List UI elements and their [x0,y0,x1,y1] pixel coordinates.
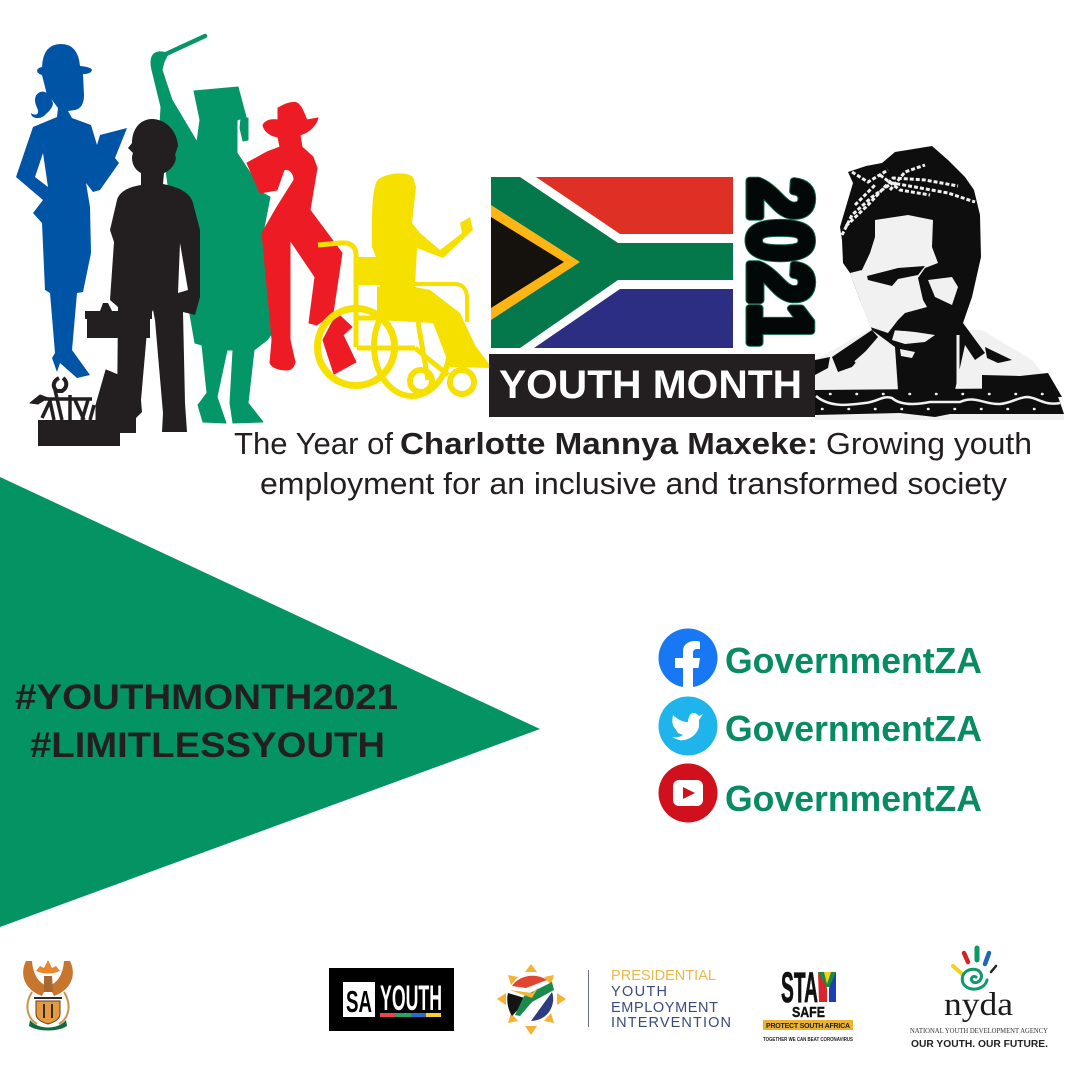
hashtags: #YOUTHMONTH2021 [15,678,398,717]
logo wordmark [611,968,731,1031]
green triangle panel [0,477,540,927]
icon: twitter [658,696,718,756]
hashtags [15,678,398,765]
logo divider [588,970,589,1027]
portrait bust background [815,328,1064,420]
social: twitter [658,696,982,756]
silhouette: green graduate [151,36,277,423]
subtitle [234,426,1032,501]
logo: NYDA: OUR YOUTH. OUR FUTURE. [911,1038,1048,1050]
silhouette: blue woman with clipboard [16,44,127,378]
portrait garment dots [822,394,1060,409]
logo wordmark: INTERVENTION [611,1015,731,1031]
logo: NYDA: nyda [944,987,1013,1023]
logo hand and spiral [953,948,996,989]
subtitle: The Year of [234,426,393,461]
social: twitter: GovernmentZA [725,708,982,749]
flag black triangle [491,217,564,308]
logo: Stay Safe: TOGETHER WE CAN BEAT CORONAVIRUS [763,1037,853,1043]
subtitle: employment for an inclusive and transformed society [260,466,1008,501]
logo sun rays [497,964,566,1035]
silhouette: black worker with toolbox [38,119,200,446]
social: facebook: GovernmentZA [725,640,982,681]
logo: NYDA [910,948,1049,1050]
portrait face highlights [850,215,938,333]
silhouette: red worker with hat [247,102,356,374]
logo globe flag [507,976,554,1022]
illustration: youth silhouettes [16,36,492,446]
portrait hair and shadow [840,146,985,390]
year 2021 vertical: 2021 [731,178,830,345]
year 2021 vertical: 2021 [731,178,830,345]
icon: youtube [658,764,718,822]
flag green pall [491,177,733,348]
portrait neck bead strip [956,335,960,390]
logo: SA Youth [329,968,454,1031]
logo: NYDA: NATIONAL YOUTH DEVELOPMENT AGENCY [910,1026,1049,1035]
logo: Stay Safe [763,964,853,1043]
icon: facebook [658,628,718,688]
logo wordmark: EMPLOYMENT [611,1000,718,1016]
portrait neckline lines [855,340,880,362]
logo: coat of arms [23,960,73,1030]
portrait right cheek [928,277,958,305]
subtitle: Growing youth [826,426,1032,461]
flag gold triangle [491,205,580,320]
South African flag [491,177,733,348]
social: youtube: GovernmentZA [725,778,982,819]
portrait collar patches [815,330,1062,397]
logo: Stay Safe: STA [781,964,818,1012]
portrait: Charlotte Maxeke [815,146,1064,420]
subtitle: Charlotte Mannya Maxeke: [400,426,818,461]
portrait left eye [867,266,925,286]
portrait mouth area [892,330,935,358]
social: youtube [658,764,982,822]
portrait garment wave [816,396,1060,405]
logo wordmark: PRESIDENTIAL [611,968,716,984]
logo: SA Youth: YOUTH [380,979,442,1018]
logo wordmark: YOUTH [611,984,667,1000]
logo: SA Youth: SA [346,984,372,1019]
portrait garment band [815,388,1064,417]
portrait scarf pattern [842,165,975,235]
logo: presidential youth employment intervention [497,964,731,1035]
social: facebook [658,628,982,688]
icon: open tool box [30,370,120,420]
logo: Stay Safe: PROTECT SOUTH AFRICA [766,1023,850,1030]
logo flag Y [818,972,836,1002]
portrait mouth line [890,320,935,331]
youth month banner [489,354,815,417]
flag blue band [534,289,733,348]
flag red band [536,177,733,234]
silhouette: yellow wheelchair user [318,173,492,396]
logo: Stay Safe: SAFE [792,1004,825,1021]
hashtags: #LIMITLESSYOUTH [30,726,385,765]
youth month banner: YOUTH MONTH [499,363,802,407]
